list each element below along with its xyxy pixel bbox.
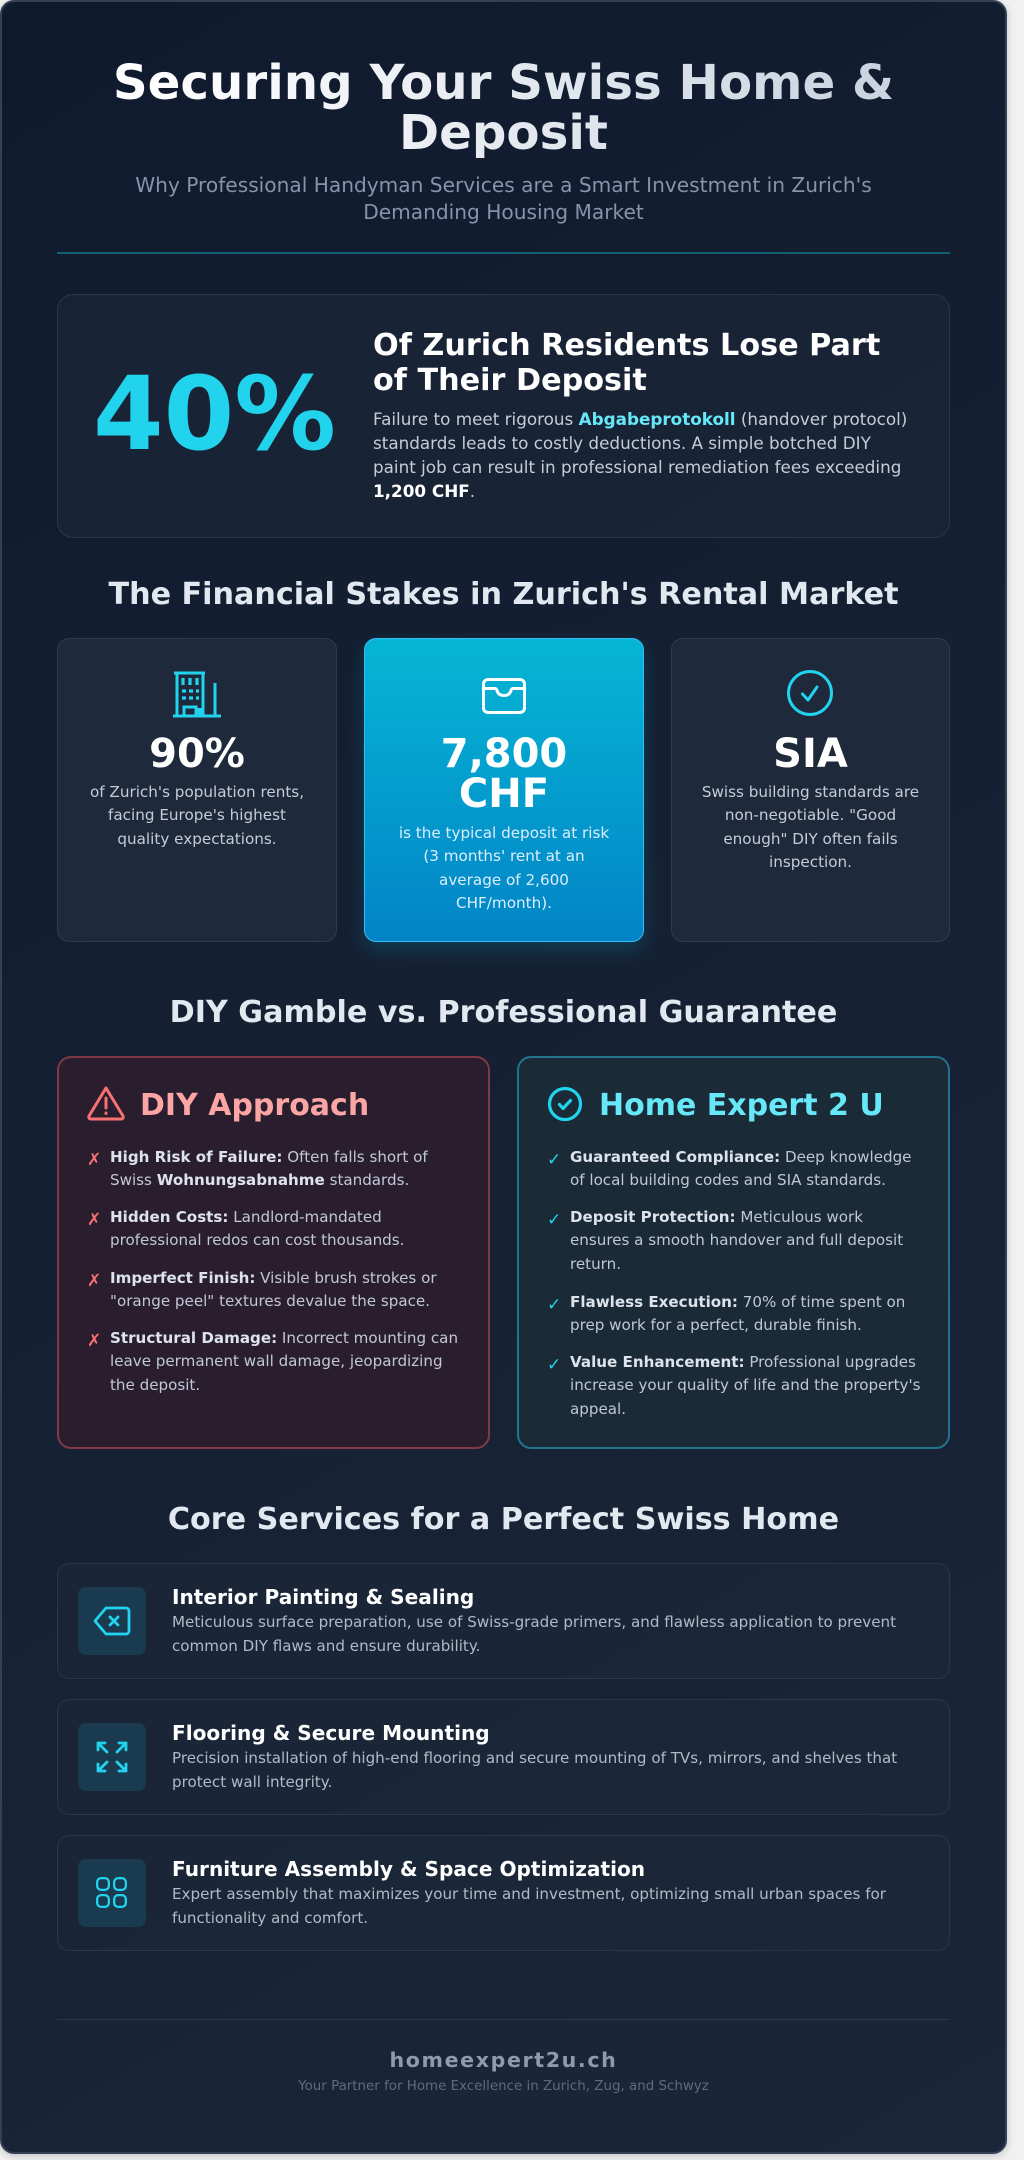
hero text: paint job can result in professional remediation fees exceeding (373, 457, 901, 477)
description (399, 824, 610, 912)
icon: building (173, 672, 221, 718)
hero text: standards leads to costly deductions. A simple botched DIY (373, 433, 871, 453)
service title: Flooring & Secure Mounting (172, 1721, 490, 1745)
description: quality expectations. (117, 830, 277, 848)
panel: Home Expert 2 U (517, 1056, 950, 1449)
list: DIY risks: ✗ (87, 1210, 101, 1230)
description: is the typical deposit at risk (399, 824, 609, 842)
icon: wallet (482, 678, 526, 714)
description: (3 months' rent at an (423, 847, 585, 865)
item: value enhancement (547, 1353, 920, 1418)
service description: protect wall integrity. (172, 1773, 332, 1791)
list: professional benefits: ✓ (547, 1150, 561, 1170)
hero heading (373, 328, 880, 398)
service description (172, 1613, 896, 1655)
list: DIY risks: ✗ (87, 1271, 101, 1291)
list: professional benefits: appeal. (570, 1400, 626, 1418)
DIY heading: DIY Approach (140, 1088, 369, 1123)
icon: expand arrows (78, 1723, 146, 1791)
title: Securing Your Swiss Home & (113, 55, 894, 111)
panel: 40 percent hero (57, 294, 950, 538)
Home Expert heading: Home Expert 2 U (599, 1088, 884, 1123)
panel: DIY approach (57, 1056, 490, 1449)
list: DIY risks: Swiss Wohnungsabnahme standards. (110, 1171, 409, 1189)
statistic: SIA (773, 731, 848, 777)
panel: 7,800 CHF deposit (364, 638, 644, 942)
subtitle (135, 173, 872, 224)
item: hidden costs (87, 1208, 404, 1249)
item: imperfect finish (87, 1269, 437, 1310)
icon: eraser tag (78, 1587, 146, 1655)
description: of Zurich's population rents, (90, 783, 304, 801)
item: structural damage (87, 1329, 458, 1394)
item: deposit protection (547, 1208, 903, 1273)
statistic (441, 731, 567, 817)
list: DIY risks: professional redos can cost thousands. (110, 1231, 404, 1249)
item: compliance (547, 1148, 911, 1189)
list: professional benefits: Value Enhancement: Professional upgrades (570, 1353, 916, 1371)
list: DIY risks: Imperfect Finish: Visible brush strokes or (110, 1269, 437, 1287)
list: professional benefits: ✓ (547, 1210, 561, 1230)
list: professional benefits: ensures a smooth handover and full deposit (570, 1231, 903, 1249)
item: flawless execution (547, 1293, 905, 1334)
service description (172, 1885, 886, 1927)
service title: Furniture Assembly & Space Optimization (172, 1857, 645, 1881)
list: professional benefits: prep work for a perfect, durable finish. (570, 1316, 862, 1334)
footer divider (57, 2019, 950, 2020)
list: DIY risks: Hidden Costs: Landlord-mandated (110, 1208, 382, 1226)
description: CHF/month). (456, 894, 552, 912)
service description: functionality and comfort. (172, 1909, 368, 1927)
service description: common DIY flaws and ensure durability. (172, 1637, 480, 1655)
description: Swiss building standards are (702, 783, 919, 801)
list: professional benefits: Guaranteed Compliance: Deep knowledge (570, 1148, 911, 1166)
list: DIY risks: ✗ (87, 1331, 101, 1351)
heading: financial stakes: The Financial Stakes in Zurich's Rental Market (108, 577, 899, 612)
service description: Expert assembly that maximizes your time and investment, optimizing small urban spaces for (172, 1885, 886, 1903)
statistic: CHF (459, 771, 549, 817)
panel: 90 percent renters (57, 638, 337, 942)
hero text: 1,200 CHF. (373, 481, 475, 501)
list: professional benefits: Flawless Execution: 70% of time spent on (570, 1293, 905, 1311)
list: DIY risks: leave permanent wall damage, jeopardizing (110, 1352, 443, 1370)
list: DIY risks: "orange peel" textures devalue the space. (110, 1292, 430, 1310)
footer tagline: Your Partner for Home Excellence in Zurich, Zug, and Schwyz (298, 2079, 709, 2094)
list: DIY risks: ✗ (87, 1150, 101, 1170)
list: professional benefits: ✓ (547, 1295, 561, 1315)
icon: grid (78, 1859, 146, 1927)
icon: check circle (787, 670, 833, 716)
hero heading: Of Zurich Residents Lose Part (373, 328, 880, 363)
statistic: 90% (149, 731, 245, 777)
description: average of 2,600 (439, 871, 569, 889)
service title: Interior Painting & Sealing (172, 1585, 474, 1609)
panel: SIA standards (671, 638, 950, 942)
heading: core services: Core Services for a Perfect Swiss Home (168, 1502, 839, 1537)
list: professional benefits: of local building codes and SIA standards. (570, 1171, 886, 1189)
header divider (57, 252, 950, 254)
panel: flooring and mounting (57, 1699, 950, 1815)
hero heading: of Their Deposit (373, 362, 647, 398)
description (90, 783, 304, 848)
hero text: Failure to meet rigorous Abgabeprotokoll (handover protocol) (373, 409, 907, 429)
icon: check circle (548, 1086, 582, 1122)
icon: warning triangle (87, 1086, 125, 1120)
panel: interior painting (57, 1563, 950, 1679)
description (702, 783, 919, 871)
list: professional benefits: increase your quality of life and the property's (570, 1376, 920, 1394)
title (57, 58, 950, 158)
description: non-negotiable. "Good (725, 806, 896, 824)
service description: Precision installation of high-end flooring and secure mounting of TVs, mirrors, and shelves that (172, 1749, 897, 1767)
list: DIY risks: High Risk of Failure: Often falls short of (110, 1148, 428, 1166)
panel: furniture assembly (57, 1835, 950, 1951)
service description: Meticulous surface preparation, use of Swiss-grade primers, and flawless application to prevent (172, 1613, 896, 1631)
subtitle: Why Professional Handyman Services are a Smart Investment in Zurich's (135, 173, 872, 197)
description: facing Europe's highest (108, 806, 286, 824)
list: professional benefits: return. (570, 1255, 621, 1273)
subtitle: Demanding Housing Market (363, 200, 644, 224)
item: high risk (87, 1148, 428, 1189)
footer brand: homeexpert2u.ch (390, 2048, 617, 2072)
statistic: 7,800 (441, 731, 567, 777)
list: DIY risks (87, 1148, 458, 1394)
description: enough" DIY often fails (723, 830, 898, 848)
list: DIY risks: the deposit. (110, 1376, 200, 1394)
list: professional benefits (547, 1148, 920, 1418)
service description (172, 1749, 897, 1791)
hero text (373, 409, 907, 501)
heading: comparison: DIY Gamble vs. Professional Guarantee (170, 995, 837, 1030)
hero statistic: 40% (93, 355, 336, 473)
list: professional benefits: ✓ (547, 1355, 561, 1375)
title: Deposit (399, 105, 608, 161)
list: DIY risks: Structural Damage: Incorrect mounting can (110, 1329, 458, 1347)
list: professional benefits: Deposit Protection: Meticulous work (570, 1208, 863, 1226)
description: inspection. (769, 853, 852, 871)
